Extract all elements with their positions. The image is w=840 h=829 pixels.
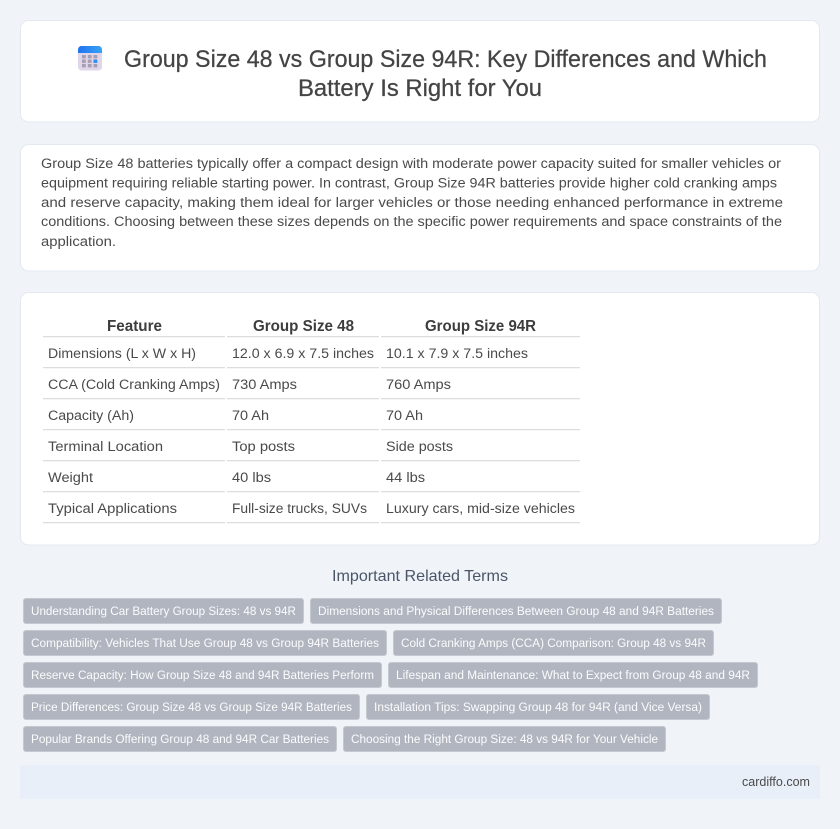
table row: typical applications: Luxury cars, mid-size vehicles — [386, 501, 575, 517]
tag: Installation Tips: Swapping Group 48 for 94R (and Vice Versa) — [374, 700, 702, 714]
table row: dimensions: 10.1 x 7.9 x 7.5 inches — [386, 346, 528, 362]
table row: dimensions: 12.0 x 6.9 x 7.5 inches — [232, 346, 374, 362]
table row: weight: Weight — [48, 470, 93, 486]
table row: typical applications: Typical Applications — [48, 501, 177, 517]
text block: description: conditions. Choosing between these sizes depends on the specific power requirements and space constraints of the — [41, 214, 782, 230]
table row: CCA: 730 Amps — [232, 377, 297, 393]
table row: weight: 40 lbs — [232, 470, 271, 486]
table row: CCA: 760 Amps — [386, 377, 451, 393]
title: Group Size 48 vs Group Size 94R: Key Differences and Which — [124, 46, 767, 73]
footer credit: cardiffo.com — [742, 774, 810, 789]
text block: description: Group Size 48 batteries typically offer a compact design with moderate power capacity suited for smaller vehicles or — [41, 156, 781, 172]
title: Battery Is Right for You — [298, 75, 542, 102]
table row: typical applications: Full-size trucks, SUVs — [232, 501, 367, 517]
table row: capacity: 70 Ah — [232, 408, 269, 424]
text block: description — [41, 156, 783, 250]
table row: weight — [48, 470, 425, 486]
tag — [388, 662, 758, 688]
footer bar — [20, 765, 820, 799]
panel: title header — [20, 20, 820, 122]
table row: CCA: CCA (Cold Cranking Amps) — [48, 377, 220, 393]
tag: Popular Brands Offering Group 48 and 94R Car Batteries — [31, 732, 329, 746]
table row: typical applications — [48, 501, 575, 517]
tag: Cold Cranking Amps (CCA) Comparison: Group 48 vs 94R — [401, 636, 706, 650]
tag — [24, 726, 336, 752]
tag: Choosing the Right Group Size: 48 vs 94R for Your Vehicle — [351, 732, 658, 746]
table row: terminal location: Side posts — [386, 439, 453, 455]
tag — [310, 598, 722, 624]
tag: Price Differences: Group Size 48 vs Group Size 94R Batteries — [31, 700, 352, 714]
table row: capacity — [48, 408, 423, 424]
table row: CCA — [48, 377, 451, 393]
title — [124, 46, 767, 102]
tag: Lifespan and Maintenance: What to Expect from Group 48 and 94R — [396, 668, 750, 682]
tag — [366, 694, 710, 720]
tag — [24, 630, 386, 656]
text block: description: application. — [41, 234, 116, 250]
panel: comparison table — [20, 292, 820, 545]
tag: Reserve Capacity: How Group Size 48 and 94R Batteries Perform — [31, 668, 374, 682]
tag — [24, 694, 360, 720]
table row: terminal location: Terminal Location — [48, 439, 163, 455]
tag — [394, 630, 714, 656]
table row: dimensions — [48, 346, 528, 362]
tag: Understanding Car Battery Group Sizes: 48 vs 94R — [31, 604, 296, 618]
table header: Group Size 48 — [253, 318, 354, 335]
table header: Feature — [107, 318, 162, 335]
heading: important related terms: Important Related Terms — [332, 568, 508, 585]
icon: calendar — [78, 46, 102, 70]
text block: description: equipment requiring reliable starting power. In contrast, Group Size 94R batteries provide higher cold cranking amps — [41, 176, 777, 192]
table row: dimensions: Dimensions (L x W x H) — [48, 346, 196, 362]
tag — [344, 726, 666, 752]
tag — [24, 598, 304, 624]
table header: Group Size 94R — [425, 318, 536, 335]
tags: related terms — [24, 598, 758, 752]
table row: weight: 44 lbs — [386, 470, 425, 486]
tag: Dimensions and Physical Differences Between Group 48 and 94R Batteries — [318, 604, 714, 618]
tag — [24, 662, 382, 688]
table row: capacity: Capacity (Ah) — [48, 408, 134, 424]
table row: capacity: 70 Ah — [386, 408, 423, 424]
table header — [107, 318, 536, 335]
table row: terminal location — [48, 439, 453, 455]
text block: description: and reserve capacity, making them ideal for larger vehicles or those needing enhanced performance in extreme — [41, 195, 783, 211]
table row: terminal location: Top posts — [232, 439, 295, 455]
panel: description — [20, 144, 820, 271]
tag: Compatibility: Vehicles That Use Group 48 vs Group 94R Batteries — [31, 636, 379, 650]
